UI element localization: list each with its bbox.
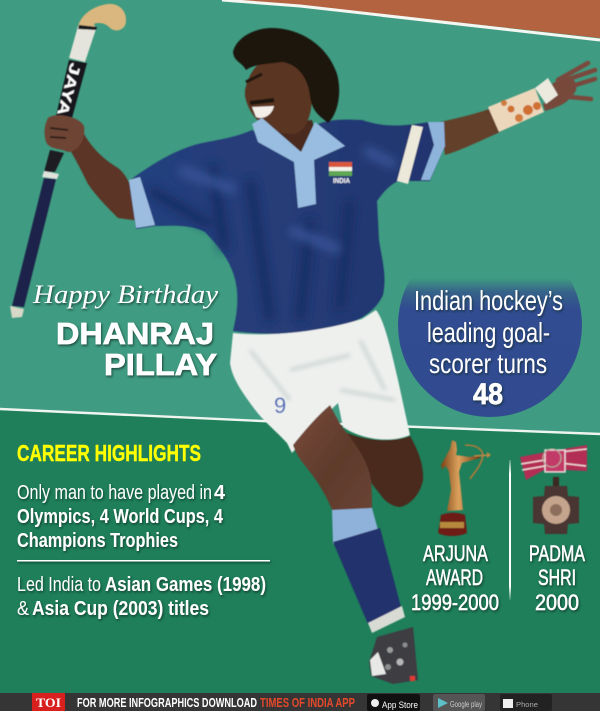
callout circle: goal-scorer: 48 bbox=[473, 378, 503, 411]
heading: Happy Birthday: Happy Birthday bbox=[32, 280, 219, 309]
career highlights list: Led India to bbox=[17, 574, 101, 596]
label: Padma Shri bbox=[529, 541, 585, 615]
left arm and hand bbox=[45, 115, 140, 221]
Windows Phone badge: Phone bbox=[516, 702, 538, 709]
callout circle: goal-scorer bbox=[398, 278, 582, 418]
callout circle: goal-scorer: leading goal- bbox=[427, 317, 550, 348]
sock band bbox=[332, 508, 378, 544]
front leg bbox=[293, 405, 372, 512]
label: Padma Shri: 2000 bbox=[535, 590, 579, 615]
career highlights list: 4 bbox=[214, 482, 226, 504]
upper field background bbox=[0, 0, 600, 440]
icon: Arjuna Award statue bbox=[438, 440, 491, 536]
face and neck bbox=[245, 56, 318, 160]
label: Arjuna Award: ARJUNA bbox=[423, 541, 488, 566]
footer bar bbox=[0, 693, 600, 711]
career highlights list bbox=[17, 482, 270, 620]
jersey bbox=[129, 120, 445, 334]
career highlights list: Olympics, 4 World Cups, 4 bbox=[17, 506, 224, 528]
running track corner bbox=[222, 0, 600, 38]
white track boundary line bbox=[222, 0, 600, 40]
Google Play badge bbox=[433, 694, 485, 711]
back leg bbox=[347, 433, 423, 507]
career highlights list: Only man to have played in bbox=[17, 482, 212, 504]
name: Dhanraj Pillay bbox=[56, 316, 217, 382]
career highlights list: Asian Games (1998) bbox=[105, 574, 266, 596]
TOI logo bbox=[32, 693, 65, 711]
career highlights list: Champions Trophies bbox=[17, 530, 178, 552]
hair bbox=[233, 28, 339, 123]
right arm and hand bbox=[440, 63, 595, 155]
career highlights list: Asia Cup (2003) titles bbox=[32, 598, 209, 620]
flag badge bbox=[329, 162, 352, 185]
Windows Phone badge bbox=[500, 694, 552, 711]
TOI logo: TOI bbox=[36, 695, 61, 710]
label: Arjuna Award: AWARD bbox=[426, 565, 483, 590]
sock cuff bbox=[368, 606, 405, 633]
label: Arjuna Award: 1999-2000 bbox=[411, 590, 499, 615]
hockey stick: JAYA bbox=[53, 61, 84, 118]
career highlights heading: CAREER HIGHLIGHTS bbox=[17, 440, 201, 466]
collar bbox=[252, 118, 345, 208]
label: Arjuna Award bbox=[411, 541, 499, 615]
icon: Padma Shri medal bbox=[520, 445, 587, 534]
Google Play badge: Google play bbox=[450, 700, 482, 709]
name: Dhanraj Pillay: DHANRAJ bbox=[56, 316, 214, 351]
award divider bbox=[509, 460, 511, 600]
shorts: 9 bbox=[274, 393, 286, 418]
lower green panel bbox=[0, 409, 600, 693]
shoe bbox=[369, 627, 418, 684]
flag badge: INDIA bbox=[333, 178, 350, 185]
footer promo text: TIMES OF INDIA APP bbox=[260, 695, 355, 710]
callout circle: goal-scorer: scorer turns bbox=[429, 348, 547, 379]
shorts bbox=[230, 310, 410, 453]
App Store badge: App Store bbox=[382, 700, 418, 710]
navy sock bbox=[333, 528, 401, 624]
App Store badge bbox=[367, 694, 420, 711]
career highlights list: & bbox=[17, 598, 30, 620]
label: Padma Shri: SHRI bbox=[538, 565, 576, 590]
name: Dhanraj Pillay: PILLAY bbox=[104, 347, 217, 382]
footer promo text: FOR MORE INFOGRAPHICS DOWNLOAD bbox=[77, 695, 257, 710]
hockey stick bbox=[10, 4, 126, 318]
